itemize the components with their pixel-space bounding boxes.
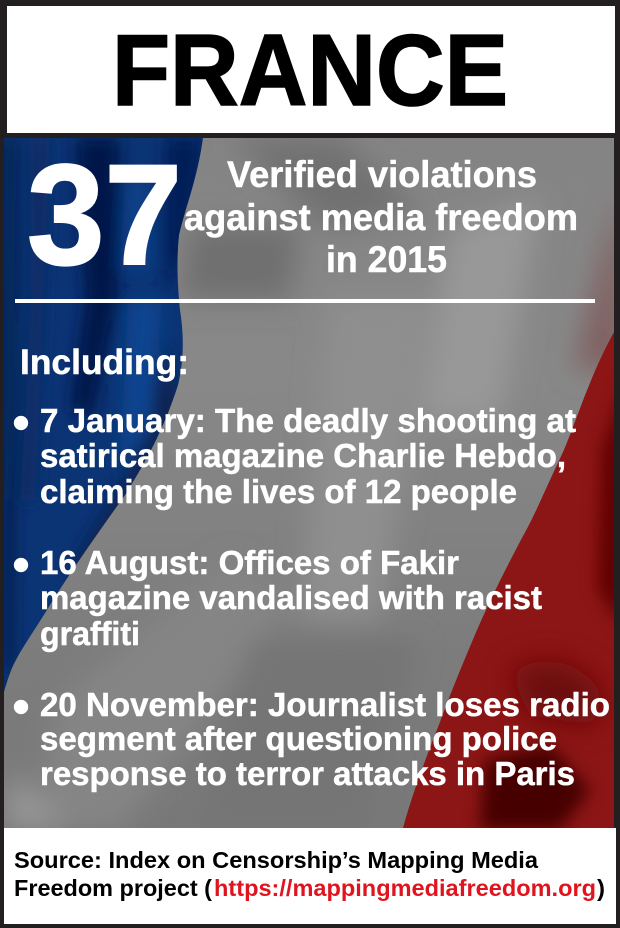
bullet 1: claiming the lives of 12 people bbox=[40, 473, 517, 510]
bullet 2: 16 August: Offices of Fakir bbox=[40, 544, 459, 581]
bullet 3: segment after questioning police bbox=[40, 720, 557, 757]
big number 37: 37 bbox=[27, 136, 182, 295]
subheading: Including: Including: bbox=[20, 342, 189, 382]
source panel bbox=[4, 828, 616, 924]
red stripe bbox=[400, 330, 620, 830]
bullet 3 bbox=[14, 686, 610, 792]
source text: Source: Index on Censorship’s Mapping Media bbox=[14, 847, 538, 873]
bullet 3: response to terror attacks in Paris bbox=[40, 755, 575, 792]
source text: https://mappingmediafreedom.org bbox=[214, 875, 596, 901]
headline text: against media freedom bbox=[184, 197, 578, 238]
bullet 1: satirical magazine Charlie Hebdo, bbox=[40, 437, 566, 474]
blue stripe bbox=[4, 138, 214, 698]
bullet 1: 7 January: The deadly shooting at bbox=[40, 402, 576, 439]
faint red fold, upper right bbox=[575, 190, 620, 370]
flag background panel bbox=[4, 138, 620, 830]
headline text: Verified violations bbox=[227, 154, 537, 195]
bullet 2: magazine vandalised with racist bbox=[40, 579, 542, 616]
source text: Freedom project ( bbox=[14, 875, 212, 901]
bullet 3: 20 November: Journalist loses radio bbox=[40, 686, 610, 723]
bullet 1 bbox=[14, 402, 576, 510]
headline statistic bbox=[27, 136, 578, 295]
bullet 2 bbox=[14, 544, 542, 652]
title: FRANCE: FRANCE bbox=[112, 15, 508, 127]
title panel bbox=[7, 6, 615, 133]
headline text: in 2015 bbox=[326, 239, 447, 280]
source text: ) bbox=[597, 875, 605, 901]
source text bbox=[14, 847, 605, 901]
headline text bbox=[184, 154, 578, 280]
bullet 2: graffiti bbox=[40, 615, 140, 652]
